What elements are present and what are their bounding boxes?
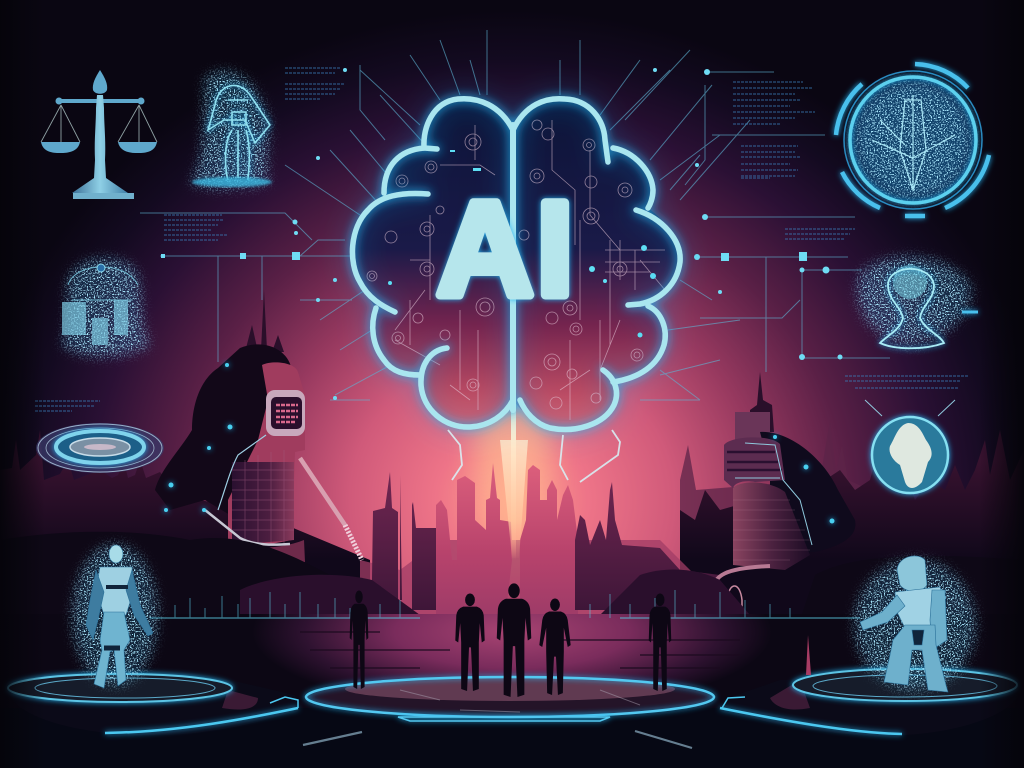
dark body <box>760 432 855 556</box>
skyline: distant left <box>0 430 370 620</box>
person 4 <box>539 599 571 695</box>
giant robot right <box>712 372 855 612</box>
AI lettering: I <box>536 175 574 324</box>
hologram robot right <box>855 556 975 692</box>
circuit nodes <box>161 68 842 400</box>
light beam glow <box>470 400 555 570</box>
tower upper pink <box>228 362 305 548</box>
ground <box>0 614 1024 768</box>
city reflections shoreline <box>150 590 860 618</box>
brain <box>352 99 680 429</box>
skyline: distant right <box>680 420 1024 620</box>
right platform <box>720 635 1018 735</box>
hologram: orb on pedestal <box>858 257 978 348</box>
brain circuitry <box>367 120 665 420</box>
head console <box>266 390 305 436</box>
hills <box>0 532 1024 620</box>
arch base <box>712 566 770 612</box>
brick tower <box>733 482 810 570</box>
people silhouettes <box>350 583 671 697</box>
lightning wires below brain <box>448 430 620 482</box>
arm and shoulder mass <box>155 344 292 515</box>
floor slashes <box>303 731 692 748</box>
body trace lines <box>735 443 812 545</box>
beam of light <box>500 300 528 560</box>
brain neon outline <box>352 99 680 429</box>
skyline: central towers <box>360 463 720 620</box>
person 2 <box>455 594 485 691</box>
spire cluster <box>750 372 774 432</box>
circuit lines around the brain <box>140 30 890 400</box>
person 3 <box>497 583 531 697</box>
hologram: round badge <box>865 400 955 493</box>
mechanical arm <box>300 458 345 525</box>
giant robot left <box>155 290 362 569</box>
cap <box>735 412 770 440</box>
tower brick <box>232 462 294 545</box>
AI lettering: A <box>437 175 533 324</box>
icon: scales of justice <box>41 70 157 199</box>
banded shell <box>724 437 785 488</box>
tiny text blocks <box>35 68 968 411</box>
base <box>222 540 305 569</box>
hologram robot left <box>73 545 157 688</box>
brain glowing dots <box>388 150 656 338</box>
center platform <box>305 676 715 721</box>
robot lights <box>164 363 232 512</box>
hologram: circular dial <box>836 64 989 216</box>
hologram: ring disc <box>36 423 164 473</box>
spire <box>245 290 284 352</box>
brain fill <box>352 99 680 429</box>
hologram: machine scene <box>62 259 150 356</box>
person 5 <box>649 594 671 691</box>
person 1 <box>350 591 368 689</box>
left platform <box>8 674 298 735</box>
hologram: primate figure <box>190 71 272 188</box>
